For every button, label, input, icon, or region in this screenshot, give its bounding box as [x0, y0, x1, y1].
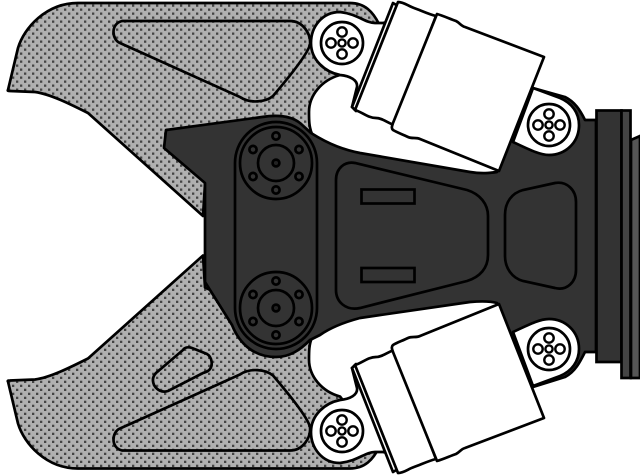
upper slot [362, 190, 414, 204]
lower right pin [528, 328, 570, 370]
pivot link plate [235, 122, 317, 349]
upper blade [8, 3, 379, 216]
upper blade cutout [114, 21, 310, 101]
central panel [336, 163, 488, 309]
lower left pin [321, 410, 363, 452]
right lower clevis ear [513, 319, 579, 386]
lower blade [8, 256, 379, 468]
lower blade small cutout [153, 347, 212, 392]
right panel [505, 183, 576, 289]
upper hydraulic cylinder [352, 2, 544, 171]
upper right pin [528, 104, 570, 146]
left upper clevis ear [311, 12, 400, 107]
rear adapter: grey end [631, 136, 640, 378]
lower blade cutout [114, 370, 310, 450]
upper pivot [240, 127, 312, 199]
right upper clevis ear [513, 88, 579, 155]
left lower clevis ear [311, 368, 400, 463]
dark central body [164, 88, 596, 387]
lower pivot [240, 272, 312, 344]
upper left pin [321, 22, 363, 64]
rear adapter block [596, 110, 630, 378]
lower hydraulic cylinder [352, 304, 544, 473]
lower slot [362, 268, 414, 282]
